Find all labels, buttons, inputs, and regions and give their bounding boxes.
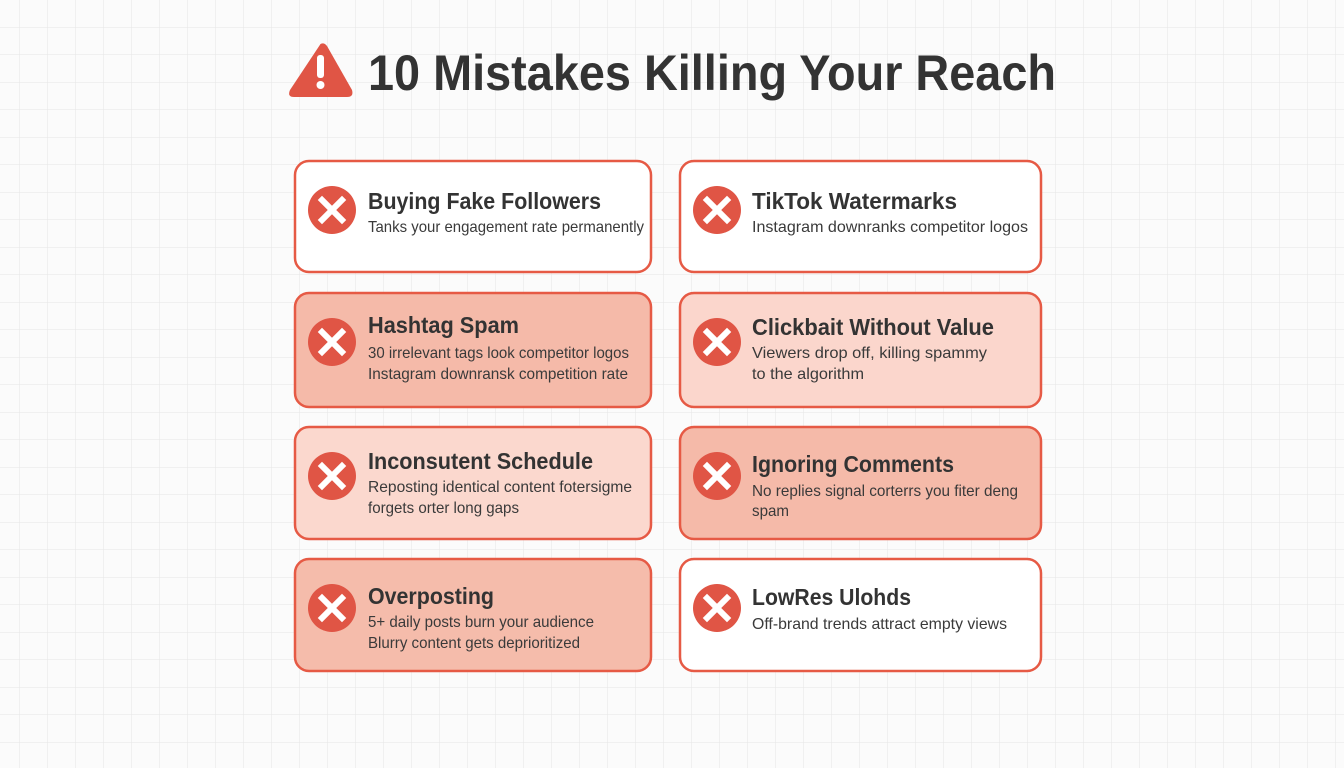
card: Clickbait Without Value: [680, 293, 1041, 407]
card: LowRes Ulohds: Off-brand trends attract empty views: [752, 616, 1007, 633]
card: Hashtag Spam: Instagram downransk competition rate: [368, 366, 628, 383]
card: Inconsutent Schedule: [295, 427, 651, 539]
card: LowRes Ulohds: [680, 559, 1041, 671]
title: 10 Mistakes Killing Your Reach: [368, 45, 1056, 101]
card: TikTok Watermarks: TikTok Watermarks: [752, 188, 957, 214]
card: Ignoring Comments: No replies signal corterrs you fiter deng: [752, 483, 1018, 500]
card: Overposting: [295, 559, 651, 671]
icon: warning triangle: [289, 43, 352, 97]
card: TikTok Watermarks: [680, 161, 1041, 272]
card: Buying Fake Followers: Buying Fake Followers: [368, 188, 601, 214]
card: TikTok Watermarks: Instagram downranks competitor logos: [752, 219, 1028, 236]
card: Hashtag Spam: 30 irrelevant tags look competitor logos: [368, 345, 629, 362]
card: Inconsutent Schedule: Reposting identical content fotersigme: [368, 479, 632, 496]
card: Ignoring Comments: spam: [752, 503, 789, 520]
card: Buying Fake Followers: [295, 161, 651, 272]
card: Buying Fake Followers: Tanks your engagement rate permanently: [368, 219, 644, 236]
card: Clickbait Without Value: Viewers drop off, killing spammy: [752, 345, 987, 362]
card: Inconsutent Schedule: Inconsutent Schedule: [368, 448, 593, 474]
card: Clickbait Without Value: to the algorithm: [752, 366, 864, 383]
card: LowRes Ulohds: LowRes Ulohds: [752, 584, 911, 610]
card: Hashtag Spam: Hashtag Spam: [368, 312, 519, 338]
card: Overposting: Blurry content gets deprioritized: [368, 635, 580, 652]
card: Overposting: Overposting: [368, 583, 494, 609]
card: Ignoring Comments: Ignoring Comments: [752, 451, 954, 477]
card: Overposting: 5+ daily posts burn your audience: [368, 614, 594, 631]
card: Clickbait Without Value: Clickbait Without Value: [752, 314, 994, 340]
card: Ignoring Comments: [680, 427, 1041, 539]
card: Hashtag Spam: [295, 293, 651, 407]
card: Inconsutent Schedule: forgets orter long gaps: [368, 500, 519, 517]
